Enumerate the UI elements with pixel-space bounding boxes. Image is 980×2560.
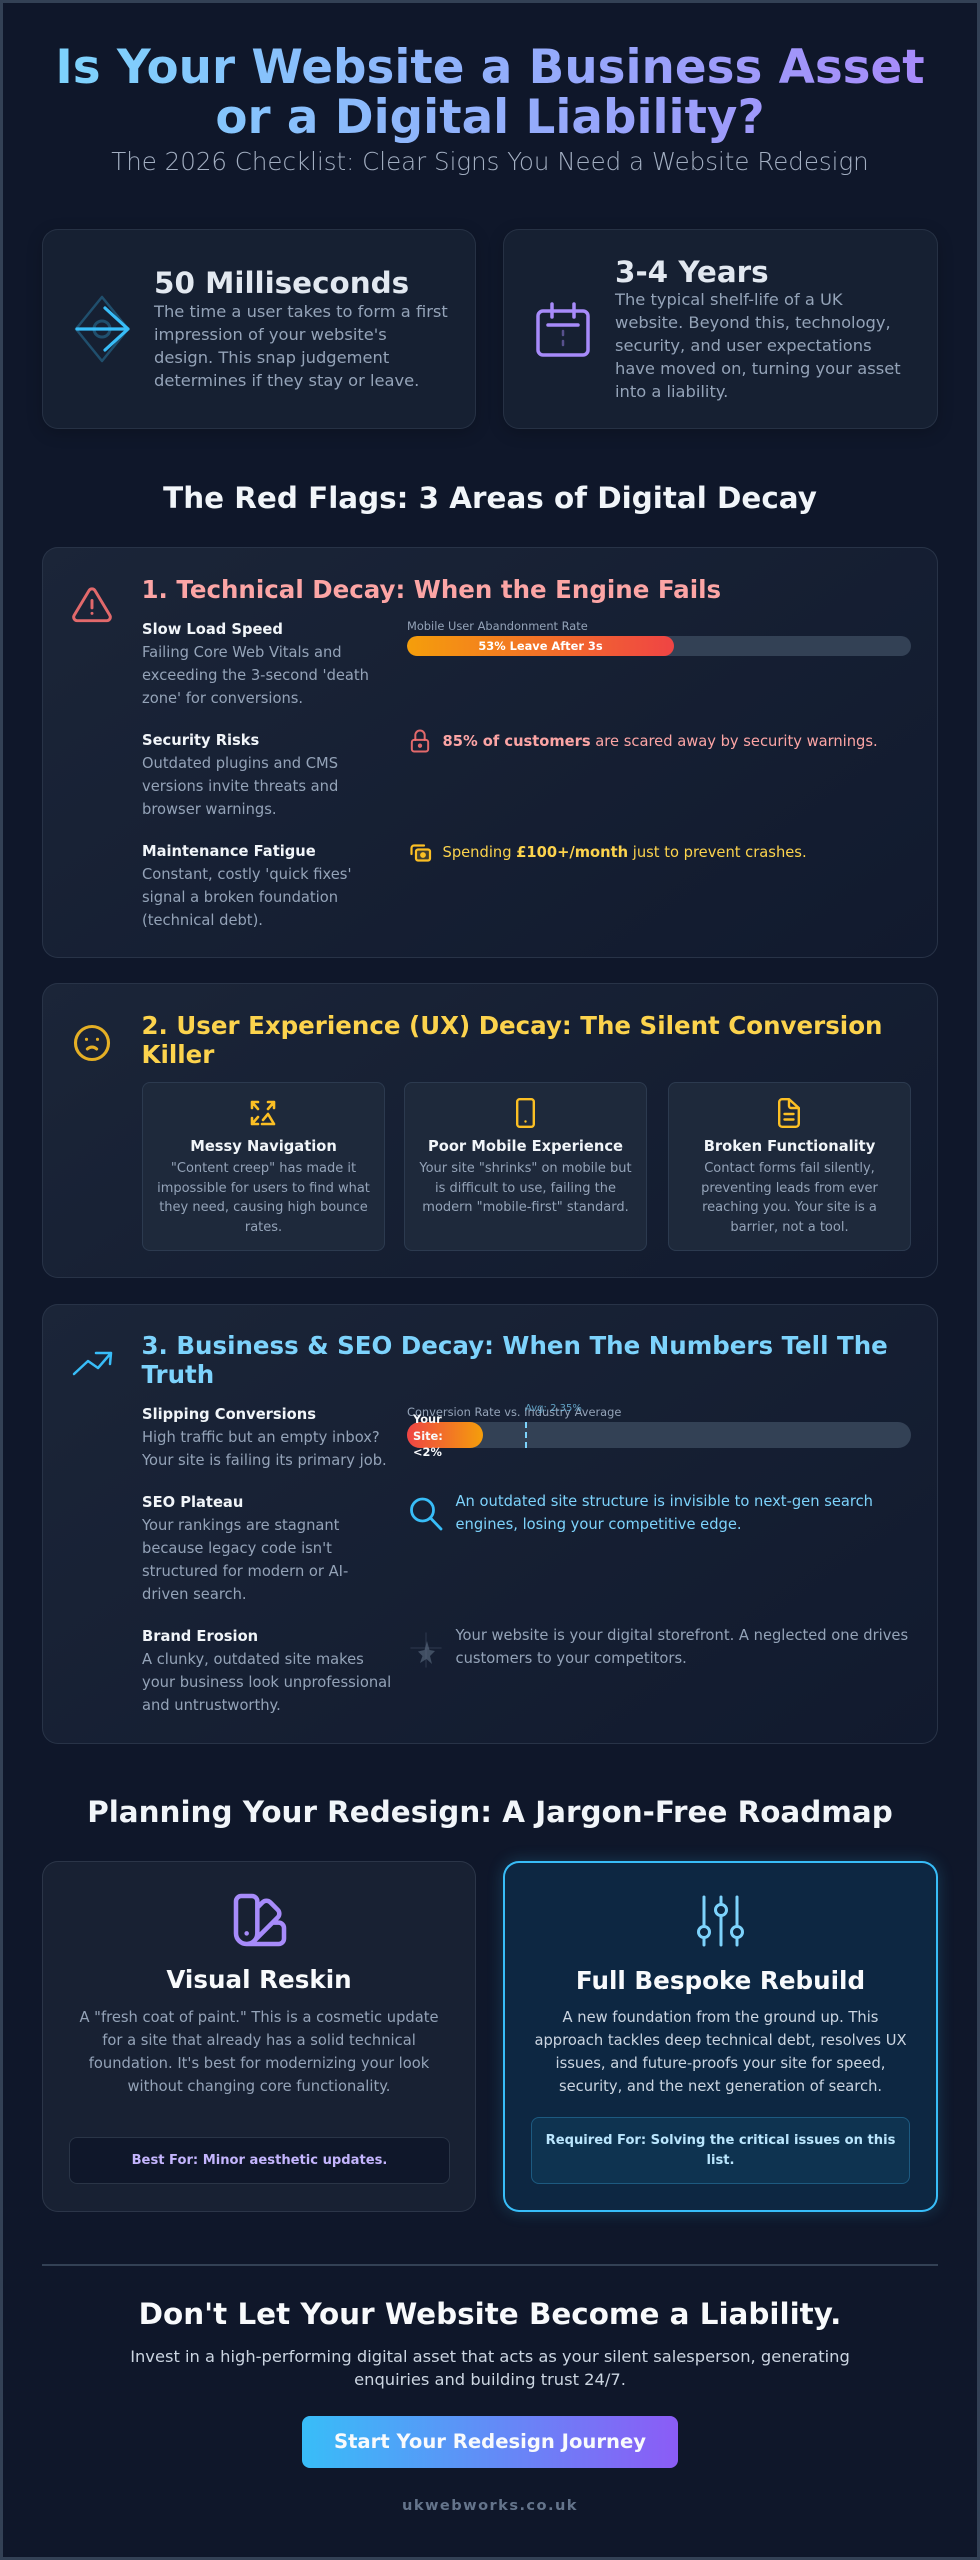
card description: barrier, not a tool.	[730, 1220, 849, 1235]
item: slow load speed: Failing Core Web Vitals and	[142, 644, 342, 661]
option title: Visual Reskin	[166, 1965, 352, 1994]
section heading	[142, 1331, 888, 1389]
icon: sliders	[697, 1896, 744, 1946]
option description: A new foundation from the ground up. This	[563, 2009, 878, 2026]
card description	[701, 1161, 878, 1235]
stat number: 3-4 Years	[615, 255, 769, 289]
option description: approach tackles deep technical debt, resolves UX	[534, 2032, 907, 2049]
item: slipping conversions	[142, 1406, 387, 1469]
stat description: The typical shelf-life of a UK	[615, 290, 843, 309]
card description: Your site "shrinks" on mobile but	[419, 1161, 632, 1176]
callout: security stat: 85% of customers are scared away by security warnings.	[442, 733, 878, 750]
stat description: design. This snap judgement	[154, 348, 389, 367]
callout: seo: An outdated site structure is invisible to next-gen search	[456, 1493, 873, 1510]
call to action text: enquiries and building trust 24/7.	[354, 2370, 626, 2389]
bar value label: Site:	[413, 1428, 443, 1442]
stat description: The time a user takes to form a first	[154, 302, 448, 321]
icon: mobile phone	[516, 1098, 535, 1128]
heading: roadmap: Planning Your Redesign: A Jargon-Free Roadmap	[87, 1795, 893, 1829]
item: maintenance fatigue: (technical debt).	[142, 912, 263, 929]
option description	[534, 2009, 907, 2095]
panel: ux decay	[42, 983, 938, 1278]
item: seo plateau	[142, 1494, 348, 1603]
title: Is Your Website a Business Asset	[55, 41, 925, 95]
item: seo plateau: SEO Plateau	[142, 1494, 243, 1511]
bar chart: conversion rate	[407, 1422, 911, 1448]
card title: Messy Navigation	[190, 1138, 337, 1155]
panel: business and seo decay	[42, 1304, 938, 1744]
item: slow load speed: Slow Load Speed	[142, 621, 283, 638]
stat description: have moved on, turning your asset	[615, 359, 901, 378]
callout: maintenance cost: Spending £100+/month just to prevent crashes.	[442, 844, 807, 861]
stat description: security, and user expectations	[615, 336, 872, 355]
option title: Full Bespoke Rebuild	[576, 1966, 865, 1995]
bar value label	[412, 1412, 443, 1459]
stat number: 50 Milliseconds	[154, 266, 409, 300]
panel: technical decay	[42, 547, 938, 958]
call to action text	[130, 2347, 850, 2389]
section heading: Killer	[142, 1040, 214, 1069]
item: slipping conversions: High traffic but an empty inbox?	[142, 1429, 380, 1446]
section heading: 1. Technical Decay: When the Engine Fails	[142, 575, 721, 604]
item: seo plateau: because legacy code isn't	[142, 1540, 332, 1557]
icon: magnifier	[410, 1498, 442, 1530]
card description: is difficult to use, failing the	[435, 1181, 616, 1196]
option description: issues, and future-proofs your site for speed,	[556, 2055, 885, 2072]
average marker	[525, 1422, 527, 1448]
required-for box: Required For: Solving the critical issues on this	[546, 2133, 895, 2148]
item: brand erosion: Brand Erosion	[142, 1628, 258, 1645]
best-for box	[69, 2137, 450, 2184]
icon: wallet	[410, 844, 432, 862]
callout: brand: Your website is your digital storefront. A neglected one drives	[456, 1627, 908, 1644]
item: maintenance fatigue: Maintenance Fatigue	[142, 843, 316, 860]
section heading: 3. Business & SEO Decay: When The Numbers Tell The	[142, 1331, 888, 1360]
item: security risks	[142, 732, 338, 818]
card description: reaching you. Your site is a	[702, 1200, 877, 1215]
stat description: website. Beyond this, technology,	[615, 313, 891, 332]
bar chart: abandonment	[407, 636, 911, 656]
stat description: impression of your website's	[154, 325, 387, 344]
item: seo plateau: driven search.	[142, 1586, 247, 1603]
call to action text: Invest in a high-performing digital asset that acts as your silent salesperson, generating	[130, 2347, 850, 2366]
option description	[79, 2009, 439, 2095]
card: broken functionality	[668, 1082, 911, 1251]
bar label: Mobile User Abandonment Rate	[407, 619, 588, 633]
stat description: into a liability.	[615, 382, 728, 401]
card description: "Content creep" has made it	[171, 1161, 356, 1176]
bar value label: Your	[413, 1412, 442, 1426]
panel: 3-4 years stat	[503, 229, 938, 429]
card: poor mobile experience	[404, 1082, 647, 1251]
item: maintenance fatigue: Constant, costly 'quick fixes'	[142, 866, 352, 883]
card description: modern "mobile-first" standard.	[422, 1200, 629, 1215]
subtitle: The 2026 Checklist: Clear Signs You Need a Website Redesign	[111, 147, 869, 176]
required-for box	[531, 2117, 910, 2184]
icon: colour swatch	[234, 1894, 286, 1946]
icon: calendar	[536, 302, 590, 357]
card description: Contact forms fail silently,	[704, 1161, 875, 1176]
icon: fading star	[410, 1632, 442, 1668]
icon: sad face	[74, 1025, 110, 1061]
callout: seo: engines, losing your competitive edge.	[456, 1516, 742, 1533]
icon: scattered arrows	[250, 1100, 276, 1126]
card title: Broken Functionality	[704, 1138, 875, 1155]
card: messy navigation	[142, 1082, 385, 1251]
panel: visual reskin	[42, 1861, 476, 2212]
bar fill: 53% Leave After 3s	[478, 639, 603, 653]
icon: document	[778, 1098, 800, 1128]
item: maintenance fatigue	[142, 843, 352, 929]
card title: Poor Mobile Experience	[428, 1138, 623, 1155]
icon: lock	[410, 730, 430, 752]
option description: foundation. It's best for modernizing your look	[89, 2055, 429, 2072]
best-for box: Best For: Minor aesthetic updates.	[132, 2153, 387, 2168]
heading: red flags: The Red Flags: 3 Areas of Digital Decay	[163, 481, 817, 515]
item: security risks: Outdated plugins and CMS	[142, 755, 338, 772]
footer website: ukwebworks.co.uk	[402, 2497, 578, 2514]
icon: diamond arrow	[74, 296, 130, 362]
heading: call to action: Don't Let Your Website Become a Liability.	[139, 2297, 841, 2331]
item: seo plateau: Your rankings are stagnant	[142, 1517, 339, 1534]
title	[0, 43, 980, 143]
item: slow load speed	[142, 621, 369, 707]
title: or a Digital Liability?	[215, 91, 765, 145]
required-for box: list.	[706, 2153, 734, 2168]
option description: for a site that already has a solid technical	[102, 2032, 416, 2049]
bar fill	[407, 636, 674, 656]
bar fill	[407, 1422, 483, 1448]
card description: preventing leads from ever	[701, 1181, 878, 1196]
callout: brand: customers to your competitors.	[456, 1650, 687, 1667]
stat description	[614, 290, 901, 401]
option description: without changing core functionality.	[128, 2078, 390, 2095]
item: brand erosion	[142, 1628, 391, 1714]
item: brand erosion: A clunky, outdated site makes	[142, 1651, 364, 1668]
average label: Avg: 2.35%	[525, 1403, 582, 1414]
stat description	[154, 302, 448, 390]
callout: seo	[456, 1493, 873, 1533]
item: slipping conversions: Slipping Conversions	[142, 1406, 316, 1423]
divider	[42, 2264, 938, 2266]
option description: A "fresh coat of paint." This is a cosmetic update	[79, 2009, 439, 2026]
item: brand erosion: and untrustworthy.	[142, 1697, 281, 1714]
item: brand erosion: your business look unprofessional	[142, 1674, 391, 1691]
item: security risks: browser warnings.	[142, 801, 277, 818]
item: slow load speed: exceeding the 3-second 'death	[142, 667, 369, 684]
panel: 50 milliseconds stat	[42, 229, 476, 429]
section heading: 2. User Experience (UX) Decay: The Silent Conversion	[142, 1011, 882, 1040]
card description	[419, 1161, 632, 1215]
item: security risks: versions invite threats and	[142, 778, 338, 795]
stat description: determines if they stay or leave.	[154, 371, 419, 390]
panel: full bespoke rebuild	[503, 1861, 938, 2212]
section heading: Truth	[142, 1360, 214, 1389]
card description: impossible for users to find what	[157, 1181, 370, 1196]
card description: they need, causing high bounce	[159, 1200, 368, 1215]
option description: security, and the next generation of search.	[559, 2078, 882, 2095]
item: slipping conversions: Your site is failing its primary job.	[142, 1452, 387, 1469]
callout: brand	[456, 1627, 908, 1667]
item: maintenance fatigue: signal a broken foundation	[142, 889, 338, 906]
item: security risks: Security Risks	[142, 732, 259, 749]
card description	[157, 1161, 370, 1235]
item: seo plateau: structured for modern or AI-	[142, 1563, 348, 1580]
bar label: Conversion Rate vs. Industry Average	[407, 1405, 621, 1419]
icon: trend line	[72, 1352, 112, 1376]
bar value label: <2%	[413, 1445, 442, 1459]
icon: warning triangle	[72, 587, 112, 622]
button: start your redesign	[302, 2416, 678, 2468]
section heading	[142, 1011, 882, 1069]
button: start your redesign: Start Your Redesign Journey	[334, 2430, 646, 2453]
card description: rates.	[245, 1220, 282, 1235]
item: slow load speed: zone' for conversions.	[142, 690, 303, 707]
